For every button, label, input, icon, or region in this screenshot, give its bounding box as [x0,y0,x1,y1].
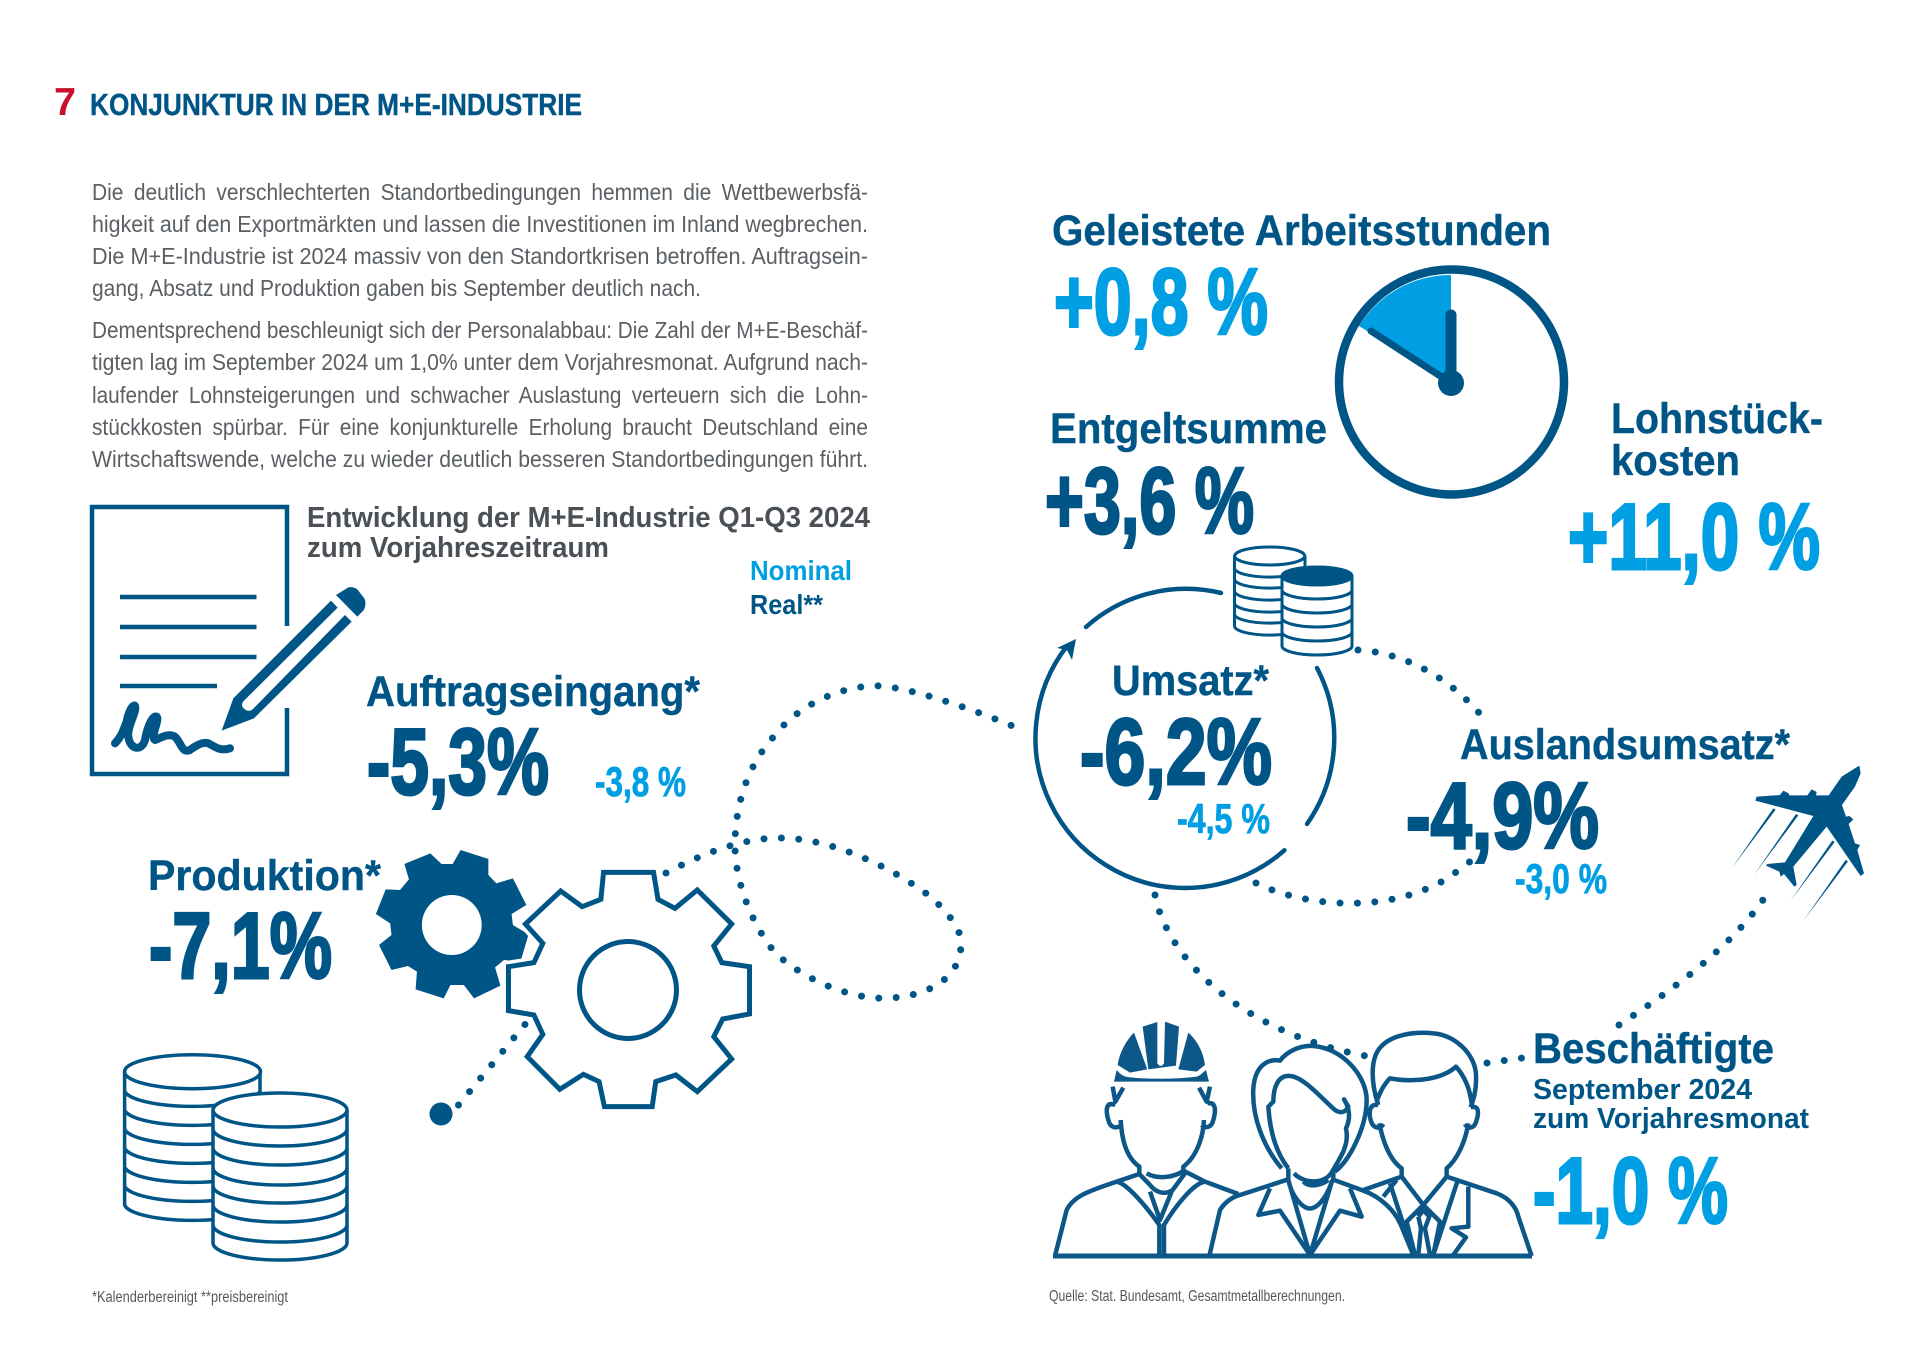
section title: KONJUNKTUR IN DER M+E-INDUSTRIE [90,87,582,122]
legend: nominal and real: Real** [750,589,823,620]
footnote: *Kalenderbereinigt **preisbereinigt [92,1289,289,1306]
stat: Entgeltsumme: Entgeltsumme [1050,405,1327,453]
intro text: Dementsprechend beschleunigt sich der Personalabbau: Die Zahl der M+E-Beschäf- [92,317,868,343]
icon: small coin stacks [1234,547,1352,655]
dotted connector: coins to Auslandsumsatz [1358,650,1480,714]
intro text: laufender Lohnsteigerungen und schwacher Auslastung verteuern sich die Lohn- [92,382,868,408]
dotted connector: start point to gear [430,1022,527,1126]
intro text: stückkosten spürbar. Für eine konjunkturelle Erholung braucht Deutschland eine [92,414,868,440]
icon: document with pencil [92,507,365,774]
stat: Beschäftigte: Beschäftigte [1533,1025,1774,1073]
stat: Lohnstückkosten [1568,395,1823,589]
dotted connector: Umsatz to Beschäftigte [1155,895,1366,1056]
stat: Auslandsumsatz: -4,9% [1406,763,1599,868]
icon: worker with hard hat [1055,1022,1238,1256]
stat: Lohnstückkosten: Lohnstück- [1611,395,1823,443]
intro text: higkeit auf den Exportmärkten und lassen die Investitionen im Inland wegbrechen. [92,211,868,237]
intro text: tigten lag im September 2024 um 1,0% unter dem Vorjahresmonat. Aufgrund nach- [92,349,868,375]
section title: 7 [54,81,76,124]
intro text [92,179,868,472]
stat: Geleistete Arbeitsstunden: +0,8 % [1054,249,1268,354]
stat: Entgeltsumme: +3,6 % [1045,448,1254,553]
icon: gears [376,850,750,1107]
intro text: Die M+E-Industrie ist 2024 massiv von den Standortkrisen betroffen. Auftragsein- [92,243,868,269]
stat: Beschäftigte: -1,0 % [1533,1138,1728,1243]
stat ring: Umsatz: Umsatz* [1112,657,1269,705]
stat: Geleistete Arbeitsstunden [1052,207,1551,354]
stat ring: Umsatz [1035,589,1334,888]
stat: Produktion: -7,1% [149,893,332,998]
intro text: gang, Absatz und Produktion gaben bis September deutlich nach. [92,275,701,301]
baseline [1053,1254,1532,1258]
stat: Auslandsumsatz [1406,721,1790,902]
stat: Lohnstückkosten: kosten [1611,437,1740,485]
stat: Geleistete Arbeitsstunden: Geleistete Arbeitsstunden [1052,207,1551,255]
icon: woman and man [1209,1033,1532,1256]
intro text: Die deutlich verschlechterten Standortbedingungen hemmen die Wettbewerbsfä- [92,179,868,205]
heading: development of the industry [307,502,870,564]
section title [54,81,582,124]
heading: development of the industry: zum Vorjahreszeitraum [307,532,609,564]
dotted connector: people to Beschäftigte [1487,1058,1522,1063]
stat: Auftragseingang: -5,3% [367,709,549,814]
stat: Produktion: Produktion* [148,852,381,900]
stat: Auslandsumsatz: Auslandsumsatz* [1460,721,1790,769]
icon: clock [1339,270,1564,494]
icon: three employees [1053,1022,1532,1256]
stat: Auslandsumsatz: -3,0 % [1515,855,1607,902]
icon: airplane [1732,766,1864,920]
stat: Beschäftigte: zum Vorjahresmonat [1533,1103,1809,1135]
dotted connector: gears to Umsatz [666,686,1027,998]
stat: Entgeltsumme [1045,405,1327,553]
legend: nominal and real: Nominal [750,555,852,586]
stat: Auftragseingang: -3,8 % [595,758,686,805]
icon: large coin stacks [124,1055,347,1260]
stat: Auftragseingang [366,668,700,814]
stat: Beschäftigte [1533,1025,1809,1243]
stat: Produktion [148,852,381,998]
stat ring: Umsatz: -6,2% [1080,699,1272,804]
legend: nominal and real [750,555,852,620]
intro text: Wirtschaftswende, welche zu wieder deutlich besseren Standortbedingungen führt. [92,446,868,472]
dotted connector: Umsatz to Auslandsumsatz [1256,857,1476,903]
heading: development of the industry: Entwicklung der M+E-Industrie Q1-Q3 2024 [307,502,870,534]
stat ring: Umsatz: -4,5 % [1177,795,1270,842]
dotted connector: Beschäftigte to plane [1619,886,1772,1025]
stat: Beschäftigte: September 2024 [1533,1074,1752,1106]
stat: Lohnstückkosten: +11,0 % [1568,484,1820,589]
stat: Auftragseingang: Auftragseingang* [366,668,700,716]
source note: Quelle: Stat. Bundesamt, Gesamtmetallberechnungen. [1049,1288,1345,1305]
